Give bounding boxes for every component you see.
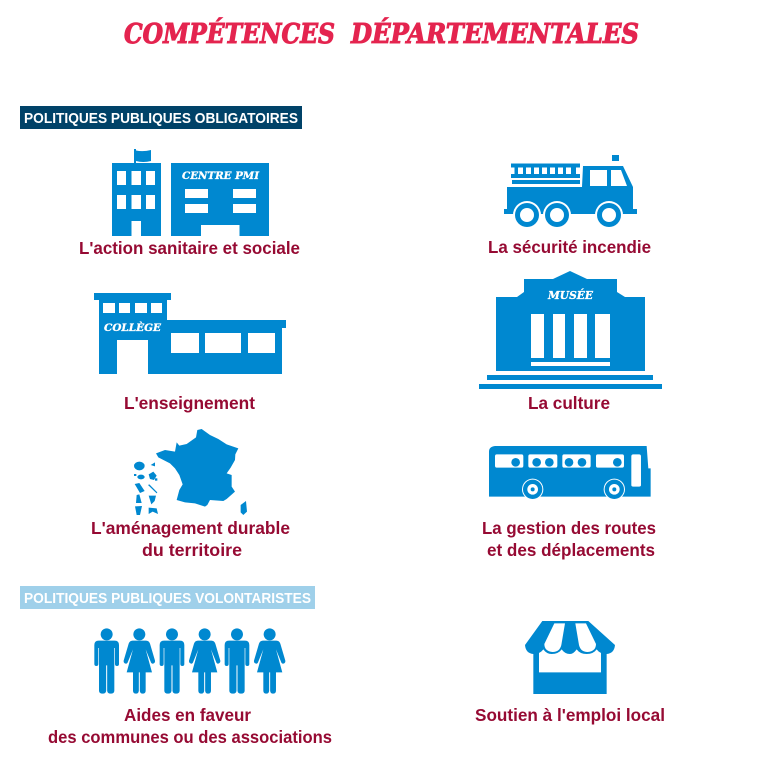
icon: musée: MUSÉE bbox=[547, 288, 594, 302]
label: aides aux communes bbox=[48, 705, 332, 747]
icon: collège: COLLÈGE bbox=[104, 320, 162, 334]
label: aides aux communes: des communes ou des associations bbox=[48, 727, 332, 747]
label: aménagement durable bbox=[91, 518, 290, 560]
banner: politiques publiques obligatoires bbox=[20, 106, 302, 129]
icon: fire truck bbox=[504, 155, 637, 229]
icon: shop bbox=[525, 621, 615, 694]
icon: centre PMI buildings bbox=[112, 149, 269, 236]
label: enseignement: L'enseignement bbox=[124, 393, 255, 413]
title: DÉPARTEMENTALES bbox=[350, 17, 639, 50]
label: gestion des routes: La gestion des routes bbox=[482, 518, 656, 538]
icon: row of people bbox=[94, 628, 285, 694]
label: sécurité incendie: La sécurité incendie bbox=[488, 237, 651, 257]
banner: politiques publiques volontaristes: POLITIQUES PUBLIQUES VOLONTARISTES bbox=[24, 590, 311, 607]
label: aides aux communes: Aides en faveur bbox=[124, 705, 251, 725]
banner: politiques publiques volontaristes bbox=[20, 586, 315, 609]
label: aménagement durable: du territoire bbox=[142, 540, 242, 560]
label: culture: La culture bbox=[528, 393, 610, 413]
banner: politiques publiques obligatoires: POLITIQUES PUBLIQUES OBLIGATOIRES bbox=[24, 110, 298, 127]
icon: centre PMI buildings: CENTRE PMI bbox=[182, 171, 259, 182]
label: aménagement durable: L'aménagement durable bbox=[91, 518, 290, 538]
label: soutien emploi: Soutien à l'emploi local bbox=[475, 705, 665, 725]
title: COMPÉTENCES bbox=[124, 17, 335, 50]
label: gestion des routes: et des déplacements bbox=[487, 540, 655, 560]
title bbox=[124, 17, 639, 50]
icon: map of France bbox=[134, 429, 247, 515]
icon: collège bbox=[94, 293, 286, 374]
icon: musée bbox=[479, 271, 662, 389]
label: gestion des routes bbox=[482, 518, 656, 560]
label: action sanitaire: L'action sanitaire et sociale bbox=[79, 238, 300, 258]
icon: bus bbox=[489, 446, 651, 500]
